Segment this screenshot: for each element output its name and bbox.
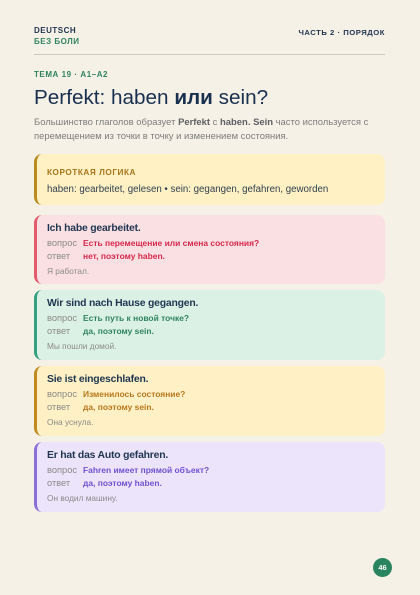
question label: вопрос <box>47 238 77 248</box>
panel heading: КОРОТКАЯ ЛОГИКА <box>47 168 136 177</box>
logic text: haben: gearbeitet, gelesen • sein: gegangen, gefahren, geworden <box>47 184 328 194</box>
translation: Он водил машину. <box>47 493 118 503</box>
sentence: Ich habe gearbeitet. <box>47 223 141 234</box>
answer: нет, поэтому haben. <box>83 251 165 261</box>
question: Есть путь к новой точке? <box>83 313 189 323</box>
question: Есть перемещение или смена состояния? <box>83 238 259 248</box>
intro text: Большинство глаголов образует Perfekt с haben. Sein часто используется с <box>34 117 368 128</box>
translation: Мы пошли домой. <box>47 341 116 351</box>
panel: example object <box>34 442 385 512</box>
answer: да, поэтому sein. <box>83 326 154 336</box>
intro text: перемещением из точки в точку и изменением состояния. <box>34 130 288 142</box>
topic label: ТЕМА 19 · А1–А2 <box>34 70 108 79</box>
header section label: ЧАСТЬ 2 · ПОРЯДОК <box>298 28 385 37</box>
title: Perfekt: haben или sein? <box>34 86 268 109</box>
translation: Я работал. <box>47 266 89 276</box>
sentence: Wir sind nach Hause gegangen. <box>47 298 198 309</box>
intro text <box>34 117 368 142</box>
question label: вопрос <box>47 389 77 399</box>
answer label: ответ <box>47 402 70 412</box>
sentence: Er hat das Auto gefahren. <box>47 450 168 461</box>
panel: short logic <box>34 154 385 205</box>
question label: вопрос <box>47 465 77 475</box>
page number: 46 <box>378 563 387 572</box>
sentence: Sie ist eingeschlafen. <box>47 374 148 385</box>
answer: да, поэтому haben. <box>83 478 162 488</box>
panel: example movement <box>34 290 385 360</box>
panel: example state <box>34 366 385 436</box>
page number <box>373 558 392 577</box>
question: Fahren имеет прямой объект? <box>83 465 209 475</box>
header brand: БЕЗ БОЛИ <box>34 36 79 46</box>
answer label: ответ <box>47 251 70 261</box>
header brand: DEUTSCH <box>34 26 76 35</box>
header brand <box>34 26 79 46</box>
answer label: ответ <box>47 478 70 488</box>
answer label: ответ <box>47 326 70 336</box>
translation: Она уснула. <box>47 417 93 427</box>
answer: да, поэтому sein. <box>83 402 154 412</box>
question: Изменилось состояние? <box>83 389 185 399</box>
panel: example haben <box>34 215 385 284</box>
question label: вопрос <box>47 313 77 323</box>
